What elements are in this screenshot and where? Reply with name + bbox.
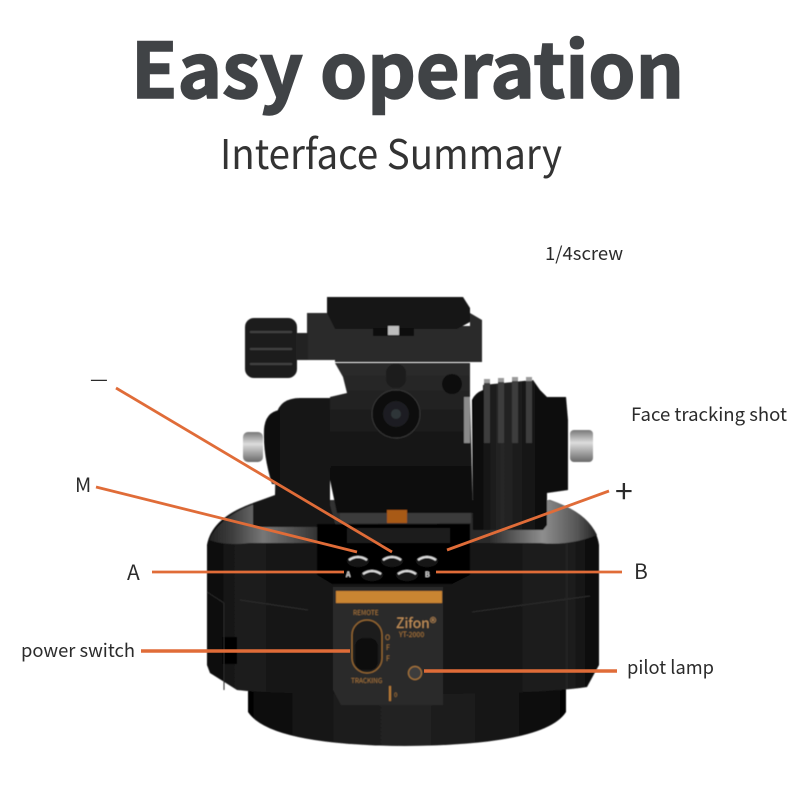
product photo: camera tracking head: REMOTE [353, 607, 379, 617]
product photo: camera tracking head: A [345, 570, 351, 580]
right screw [570, 430, 593, 462]
product photo: camera tracking head: Zifon® [396, 613, 437, 633]
line: pilot lamp [424, 669, 617, 673]
knob [245, 318, 297, 378]
main base body [207, 500, 599, 694]
label: minus: — [90, 363, 108, 392]
product photo: camera tracking head: 0 [394, 690, 398, 699]
label: A: A [127, 557, 140, 587]
centre body [330, 363, 473, 513]
product photo: camera tracking head: F [386, 654, 390, 664]
lower head strip with connector [340, 513, 471, 523]
product photo: camera tracking head: B [425, 570, 430, 580]
product photo: camera tracking head [207, 297, 599, 746]
right drum [472, 380, 547, 530]
left arm [253, 398, 336, 527]
left collar [264, 410, 280, 484]
buttons [347, 555, 438, 581]
line: minus [116, 388, 392, 552]
product photo: camera tracking head: TRACKING [351, 675, 382, 685]
label: power switch: power switch [21, 637, 135, 663]
title: Easy operation [131, 10, 684, 120]
top plate [327, 297, 470, 329]
clamp [307, 313, 335, 360]
left screw [243, 432, 263, 462]
product photo: camera tracking head: O [385, 633, 390, 643]
label: 1/4 screw: 1/4screw [545, 240, 623, 266]
label: plus: + [615, 467, 633, 513]
product photo: camera tracking head: F [386, 643, 390, 653]
right collar [547, 397, 568, 493]
label: pilot lamp: pilot lamp [627, 654, 714, 680]
line: A [152, 571, 344, 573]
side clip on base [222, 637, 237, 664]
control panel [333, 587, 443, 705]
line: B [436, 571, 622, 573]
line: M [96, 487, 357, 552]
line: plus [447, 491, 609, 550]
label: face tracking shot: Face tracking shot [631, 401, 787, 427]
control well [317, 524, 470, 584]
label: B: B [634, 556, 648, 586]
lens [372, 390, 420, 438]
top bevel of base [209, 500, 597, 544]
lower ring of base [248, 680, 566, 746]
product photo: camera tracking head: YT-2000 [398, 630, 424, 640]
label: M: M [75, 469, 91, 498]
line: power switch [141, 649, 350, 653]
subtitle: Interface Summary [220, 121, 562, 181]
callout lines [96, 388, 622, 671]
